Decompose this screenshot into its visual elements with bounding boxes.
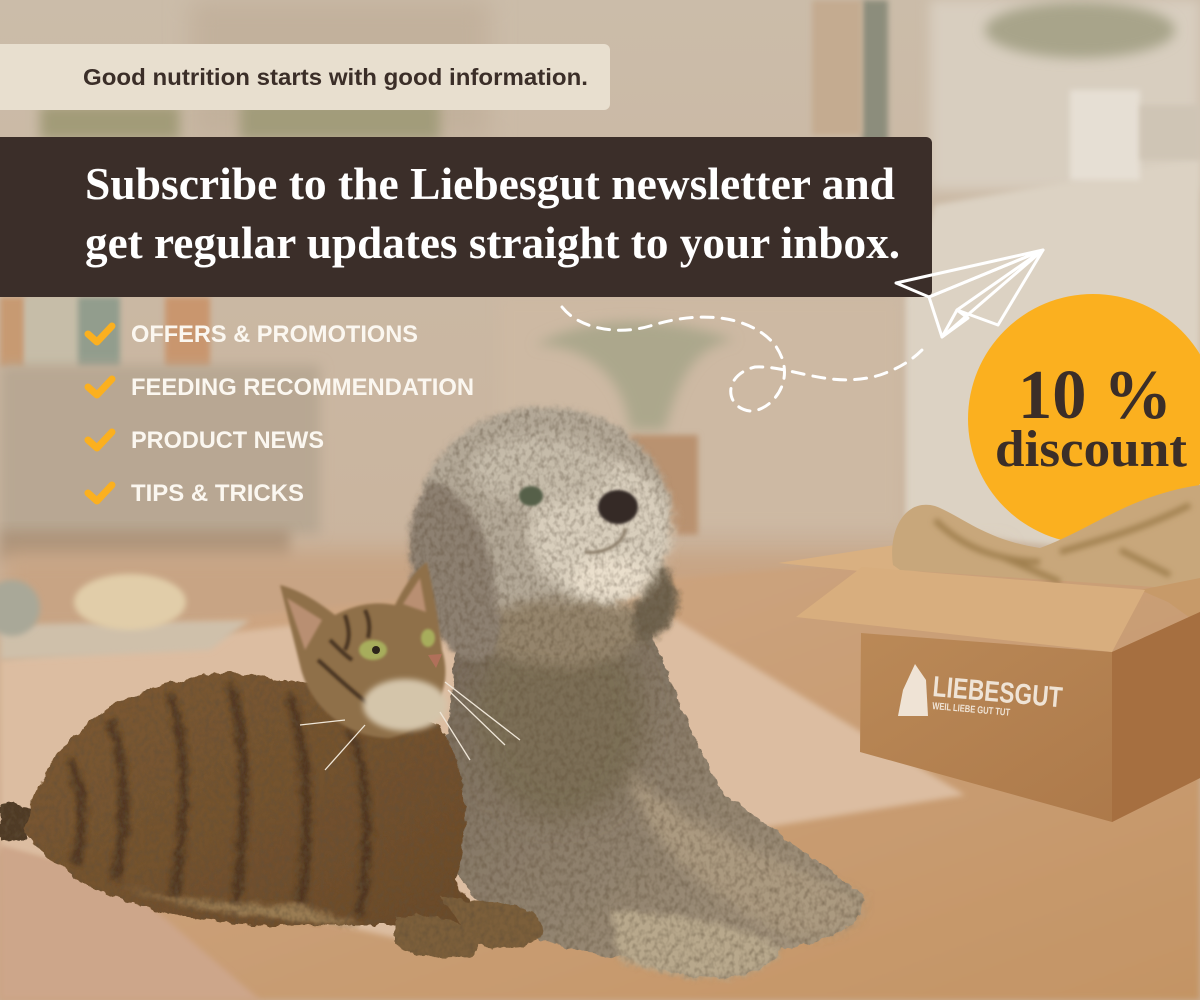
- badge circle: [968, 294, 1200, 544]
- cat head: [280, 562, 445, 738]
- cat head stripes: [318, 610, 370, 705]
- item: offers: OFFERS & PROMOTIONS: [131, 321, 418, 348]
- dog neck: [470, 599, 655, 666]
- dog right ear: [634, 560, 677, 642]
- dashed flight path arrow: [562, 307, 922, 411]
- cat head group: [280, 562, 520, 770]
- box right flap: [1140, 578, 1200, 625]
- dog mouth: [585, 528, 625, 553]
- tissue paper: [892, 485, 1200, 590]
- badge value: 10 %: [1018, 357, 1172, 434]
- dog front leg: [630, 770, 862, 935]
- discount badge: [968, 294, 1200, 544]
- headline panel: [0, 137, 932, 297]
- tagline text: Good nutrition starts with good information.: [83, 64, 588, 90]
- item: tips: TIPS & TRICKS: [131, 480, 304, 507]
- cat belly light: [120, 885, 360, 925]
- tagline banner: [0, 44, 610, 110]
- dog illustration: [409, 407, 863, 978]
- dog head: [420, 407, 670, 623]
- cat eyes: [359, 640, 387, 660]
- headline line 1: Subscribe to the Liebesgut newsletter and: [85, 159, 895, 209]
- cat nose: [428, 654, 442, 668]
- cat front paw: [395, 915, 480, 958]
- dog muzzle: [528, 460, 672, 600]
- headline line 2: get regular updates straight to your inbox.: [85, 218, 900, 268]
- cat ears inner: [287, 578, 426, 650]
- logo wordmark: LIEBESGUT: [931, 671, 1064, 714]
- paper plane icon: [896, 250, 1043, 337]
- box front flap: [796, 567, 1145, 652]
- cardboard box with tissue paper: [778, 485, 1200, 822]
- dog chest: [475, 620, 645, 820]
- logo tagline: WEIL LIEBE GUT TUT: [932, 701, 1010, 719]
- item: feeding: FEEDING RECOMMENDATION: [131, 374, 474, 401]
- dog left ear: [409, 480, 500, 660]
- benefits checklist: [88, 321, 474, 507]
- badge label: discount: [995, 421, 1188, 478]
- dog nose: [598, 490, 638, 524]
- cat body: [25, 672, 480, 933]
- cat whiskers: [300, 682, 520, 770]
- dog face details: [519, 486, 638, 553]
- box front face: [860, 612, 1200, 822]
- cat illustration: [0, 672, 543, 958]
- cat chest: [363, 679, 447, 731]
- dog second paw: [610, 910, 780, 978]
- item: product news: PRODUCT NEWS: [131, 427, 324, 454]
- dog brow: [470, 435, 610, 505]
- cat tail: [0, 803, 32, 842]
- dog eye: [519, 486, 543, 506]
- logo mark: [898, 664, 928, 716]
- cat stripes: [70, 685, 367, 915]
- cat back paw: [440, 895, 543, 948]
- box logo: [898, 664, 1064, 719]
- dog body: [446, 630, 863, 978]
- box back flap: [778, 545, 1000, 572]
